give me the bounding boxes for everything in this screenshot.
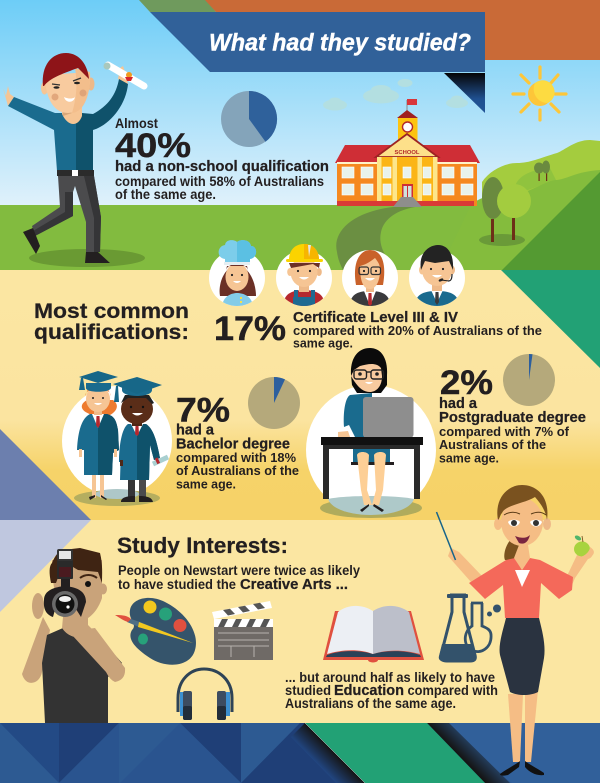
teal corner triangle <box>501 270 600 368</box>
stat: 17 percent certificate: 17% <box>214 310 286 348</box>
clouds <box>323 79 468 110</box>
pale corner triangle <box>0 520 91 612</box>
stat: 2 percent postgraduate: Australians of the <box>439 437 546 452</box>
creative arts text: People on Newstart were twice as likely <box>118 563 360 578</box>
icon: film clapperboard <box>212 601 273 660</box>
pie chart 40 percent <box>221 91 277 147</box>
background: cream band <box>0 270 600 520</box>
stat: 2 percent postgraduate <box>439 364 586 466</box>
icon: paint palette <box>115 598 196 665</box>
bottom patterned band <box>0 723 600 783</box>
education text: Australians of the same age. <box>285 696 456 711</box>
stat: 17 percent certificate: compared with 20% of Australians of the <box>293 323 542 338</box>
stat: 2 percent postgraduate: compared with 7% of <box>439 424 570 439</box>
man with diploma <box>3 53 145 267</box>
background: sky <box>0 0 600 206</box>
stat: 40 percent text: of the same age. <box>115 187 216 202</box>
stat: 2 percent postgraduate: 2% <box>440 364 493 402</box>
education text: ... but around half as likely to have <box>285 670 495 685</box>
school building <box>335 99 480 207</box>
stat: 2 percent postgraduate: Postgraduate degree <box>439 410 586 426</box>
education text <box>285 670 498 711</box>
education text: studied <box>285 683 331 698</box>
background: grass <box>0 205 600 270</box>
stat: 7 percent bachelor: same age. <box>176 476 236 492</box>
pie chart 2 percent <box>503 354 555 406</box>
creative arts text: to have studied the <box>118 577 236 592</box>
stat: 7 percent bachelor: had a <box>176 422 215 438</box>
icon: headphones <box>178 669 232 720</box>
graduates illustration <box>62 371 172 506</box>
portrait: construction worker <box>276 244 332 310</box>
stat: 2 percent postgraduate: had a <box>439 396 478 412</box>
school windows <box>342 167 473 195</box>
portrait: office woman with glasses <box>342 250 398 306</box>
sun icon <box>513 67 566 120</box>
background: lower cream band <box>0 520 600 724</box>
male graduate <box>113 377 168 502</box>
stat: 40 percent text: Almost <box>115 115 158 131</box>
teacher <box>436 485 594 776</box>
hills and trees <box>440 140 600 270</box>
top corner orange shape <box>205 0 600 60</box>
stat: 40 percent text: had a non-school qualification <box>115 158 329 175</box>
title: What had they studied? <box>209 30 471 56</box>
stat: 7 percent bachelor: of Australians of the <box>176 463 299 478</box>
icon: open book <box>323 606 424 662</box>
school sign: SCHOOL <box>394 150 420 156</box>
creative arts text: Creative Arts ... <box>240 577 348 593</box>
portrait: call centre man <box>409 245 465 306</box>
portrait: chef <box>209 240 265 308</box>
stat: 7 percent bachelor: 7% <box>176 392 230 430</box>
stat: 40 percent text <box>115 115 329 202</box>
female graduate <box>77 371 119 500</box>
path to school <box>336 207 415 270</box>
slate corner triangle <box>0 429 91 520</box>
photographer <box>22 548 125 723</box>
stat: 17 percent certificate <box>214 310 542 350</box>
stat: 17 percent certificate: Certificate Level III & IV <box>293 310 458 326</box>
top corner olive shape <box>139 0 216 12</box>
pie chart 7 percent <box>248 377 300 429</box>
stat: 2 percent postgraduate: same age. <box>439 450 499 466</box>
heading: study interests: Study Interests: <box>117 533 288 558</box>
stat: 17 percent certificate: same age. <box>293 336 353 350</box>
stat: 7 percent bachelor: compared with 18% <box>176 450 296 465</box>
education text: compared with <box>408 683 498 698</box>
stat: 40 percent text: compared with 58% of Australians <box>115 174 324 189</box>
creative arts text <box>118 563 360 593</box>
heading: most common qualifications: qualifications: <box>34 320 189 344</box>
woman at desk illustration <box>306 348 436 518</box>
heading: most common qualifications: Most common <box>34 299 189 323</box>
icon: science flasks <box>439 594 501 662</box>
stat: 7 percent bachelor: Bachelor degree <box>176 436 290 452</box>
stat: 40 percent text: 40% <box>115 127 191 165</box>
stat: 7 percent bachelor <box>176 392 299 492</box>
education text: Education <box>334 683 404 699</box>
heading: most common qualifications <box>34 299 189 344</box>
title banner <box>150 12 485 113</box>
